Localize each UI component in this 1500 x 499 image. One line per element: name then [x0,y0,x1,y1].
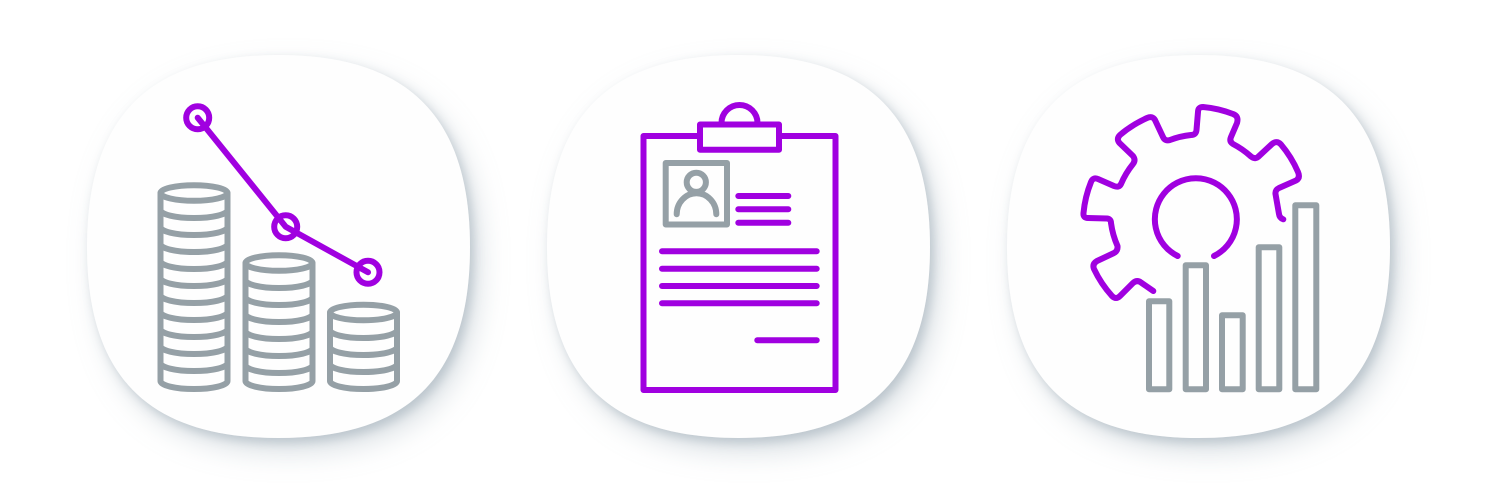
panel: resume clipboard [547,55,930,438]
card background [87,55,470,438]
text lines: body [662,251,817,303]
photo: person [666,163,727,224]
card background [547,55,930,438]
text line: signature [757,337,817,343]
clipboard board [644,136,836,390]
card background [1007,55,1390,438]
icon: coin stacks [160,185,397,389]
panel: falling costs [87,55,470,438]
bar chart [1149,205,1316,389]
panel: gear and bars [1007,55,1390,438]
coin stack: short [330,305,397,389]
clipboard clip [700,105,779,150]
icon: clipboard [644,105,836,390]
gear hub [1155,178,1237,256]
gear outline [1083,107,1299,298]
coin stack: medium [246,255,312,389]
icon: gear [1083,107,1299,298]
coin stack: tall [160,185,228,389]
text lines: name block [738,196,788,223]
line chart: falling trend [186,106,380,284]
